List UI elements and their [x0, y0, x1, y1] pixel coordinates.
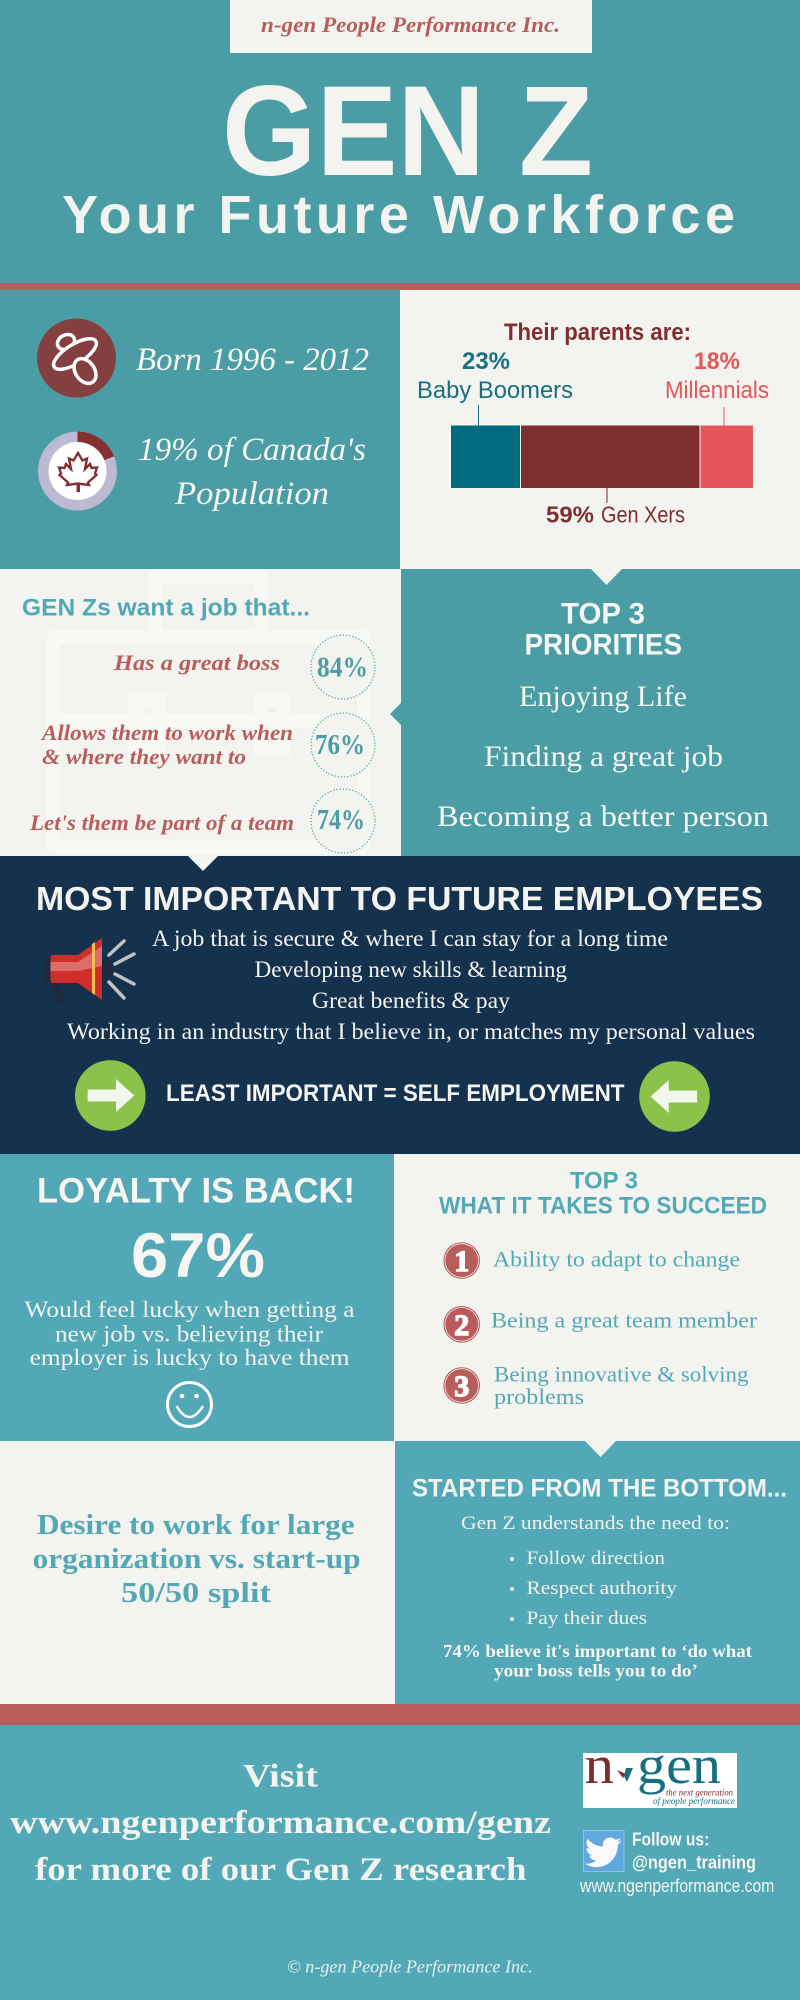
website: www.ngenperformance.com: [579, 1876, 774, 1896]
social handle: [632, 1829, 756, 1873]
loyalty description: [24, 1297, 354, 1370]
n-gen logo: gen: [637, 1735, 721, 1795]
icon: megaphone: [44, 938, 134, 1000]
social handle: Follow us:: [632, 1829, 709, 1849]
panel: job wants: [0, 569, 401, 856]
priorities list: Enjoying Life: [519, 680, 687, 713]
list of important items: Developing new skills & learning: [254, 957, 567, 982]
social handle: @ngen_training: [632, 1853, 756, 1873]
want: flexible work: Allows them to work when: [40, 720, 293, 745]
icon: twitter: [584, 1830, 624, 1872]
born years text: Born 1996 - 2012: [136, 342, 369, 378]
closing stat: your boss tells you to do’: [494, 1660, 698, 1680]
label: gen xers: Gen Xers: [601, 502, 685, 528]
item 3: problems: [494, 1384, 584, 1409]
copyright: © n-gen People Performance Inc.: [287, 1957, 533, 1977]
icon: smiley: [168, 1382, 212, 1426]
list of important items: Great benefits & pay: [312, 988, 511, 1013]
bullet list: Respect authority: [526, 1579, 678, 1599]
stacked bar chart: [451, 426, 753, 488]
item 2: [443, 1306, 758, 1343]
panel: parents chart: [400, 290, 800, 569]
panel: most important: [0, 855, 800, 1154]
chart heading: Their parents are:: [504, 319, 691, 346]
item 2: 2: [454, 1309, 469, 1342]
least important text: LEAST IMPORTANT = SELF EMPLOYMENT: [166, 1080, 625, 1107]
split text: Desire to work for large: [37, 1509, 355, 1541]
loyalty description: new job vs. believing their: [55, 1321, 323, 1346]
item 3: 3: [454, 1370, 469, 1403]
label: millennials: Millennials: [665, 377, 769, 404]
closing stat: [443, 1641, 752, 1680]
call to action: www.ngenperformance.com/genz: [10, 1805, 551, 1841]
want: great boss: [113, 635, 375, 699]
population text: 19% of Canada's: [138, 432, 366, 468]
label: millennials: [665, 348, 769, 426]
loyalty percentage: 67%: [131, 1221, 265, 1291]
panel: demographics: [0, 290, 400, 569]
want: part of a team: Let's them be part of a team: [29, 810, 294, 835]
icon: maple leaf donut: [38, 432, 117, 510]
title: GEN Z: [222, 60, 593, 203]
item 1: Ability to adapt to change: [493, 1246, 740, 1271]
panel: header: [0, 0, 800, 283]
panel: large organization vs start-up: [0, 1441, 395, 1704]
section heading: MOST IMPORTANT TO FUTURE EMPLOYEES: [36, 881, 763, 918]
want: great boss: 84%: [317, 652, 368, 684]
priorities list: Finding a great job: [484, 740, 723, 773]
item 2: Being a great team member: [491, 1308, 758, 1332]
want: flexible work: 76%: [315, 729, 365, 761]
call to action: for more of our Gen Z research: [35, 1852, 526, 1888]
icon: right arrow: [75, 1060, 146, 1131]
want: part of a team: 74%: [317, 804, 365, 836]
item 3: Being innovative & solving: [494, 1361, 748, 1386]
want: flexible work: & where they want to: [42, 744, 246, 769]
pointer: left: [390, 703, 401, 725]
item 1: 1: [454, 1245, 469, 1278]
succeed heading: [439, 1168, 767, 1220]
priorities heading: [524, 598, 682, 662]
item 3: [443, 1361, 748, 1409]
company name banner: n-gen People Performance Inc.: [261, 12, 560, 37]
n-gen logo: the next generation: [666, 1788, 733, 1798]
label: gen xers: [546, 488, 685, 528]
divider bar: top: [0, 283, 800, 290]
succeed heading: WHAT IT TAKES TO SUCCEED: [439, 1193, 767, 1220]
panel: loyalty: [0, 1154, 394, 1441]
pointer: chart panel: [591, 569, 622, 585]
want: part of a team: [29, 789, 375, 853]
intro line: Gen Z understands the need to:: [461, 1514, 730, 1534]
want: flexible work: [40, 713, 375, 777]
panel: footer: [0, 1725, 800, 2000]
priorities heading: PRIORITIES: [524, 628, 682, 662]
n-gen logo: [583, 1735, 737, 1808]
list of important items: A job that is secure & where I can stay for a long time: [152, 926, 668, 951]
bullet list: Pay their dues: [526, 1609, 647, 1629]
label: millennials: 18%: [694, 348, 740, 375]
panel: started from the bottom: [395, 1441, 800, 1704]
population text: Population: [174, 476, 329, 512]
population text: [138, 432, 366, 512]
n-gen logo: n: [584, 1735, 614, 1795]
item 1: [443, 1242, 740, 1279]
label: gen xers: 59%: [546, 502, 594, 528]
label: baby boomers: 23%: [462, 348, 510, 375]
icon: briefcase watermark: [47, 571, 370, 854]
succeed heading: TOP 3: [570, 1168, 638, 1195]
company name banner: [230, 0, 592, 53]
divider bar: bottom: [0, 1704, 800, 1725]
label: baby boomers: [417, 348, 573, 426]
priorities heading: TOP 3: [561, 598, 645, 630]
n-gen logo: of people performance: [653, 1796, 735, 1806]
split text: 50/50 split: [121, 1577, 271, 1609]
call to action: Visit: [243, 1759, 318, 1795]
label: baby boomers: Baby Boomers: [417, 377, 573, 404]
call to action: [10, 1759, 551, 1888]
panel: what it takes to succeed: [394, 1154, 800, 1441]
list of important items: Working in an industry that I believe in, or matches my personal values: [67, 1019, 755, 1044]
icon: pacifier: [37, 318, 116, 398]
bottom heading: STARTED FROM THE BOTTOM...: [412, 1474, 787, 1502]
priorities list: Becoming a better person: [437, 800, 769, 833]
bullet list: Follow direction: [526, 1549, 665, 1569]
split text: [33, 1509, 361, 1609]
subtitle: Your Future Workforce: [62, 185, 735, 245]
closing stat: 74% believe it's important to ‘do what: [443, 1641, 752, 1661]
panel heading: GEN Zs want a job that...: [22, 594, 310, 622]
loyalty heading: LOYALTY IS BACK!: [37, 1172, 355, 1210]
loyalty description: employer is lucky to have them: [30, 1345, 350, 1370]
bullet list: [510, 1549, 678, 1629]
icon: left arrow: [639, 1061, 710, 1132]
split text: organization vs. start-up: [33, 1543, 361, 1575]
panel: top 3 priorities: [390, 569, 800, 856]
priorities list: [437, 680, 769, 833]
list of important items: [67, 926, 755, 1044]
pointer: succeed panel: [585, 1441, 616, 1457]
loyalty description: Would feel lucky when getting a: [24, 1297, 354, 1322]
want: great boss: Has a great boss: [113, 650, 280, 675]
pointer: job wants: [187, 855, 219, 871]
